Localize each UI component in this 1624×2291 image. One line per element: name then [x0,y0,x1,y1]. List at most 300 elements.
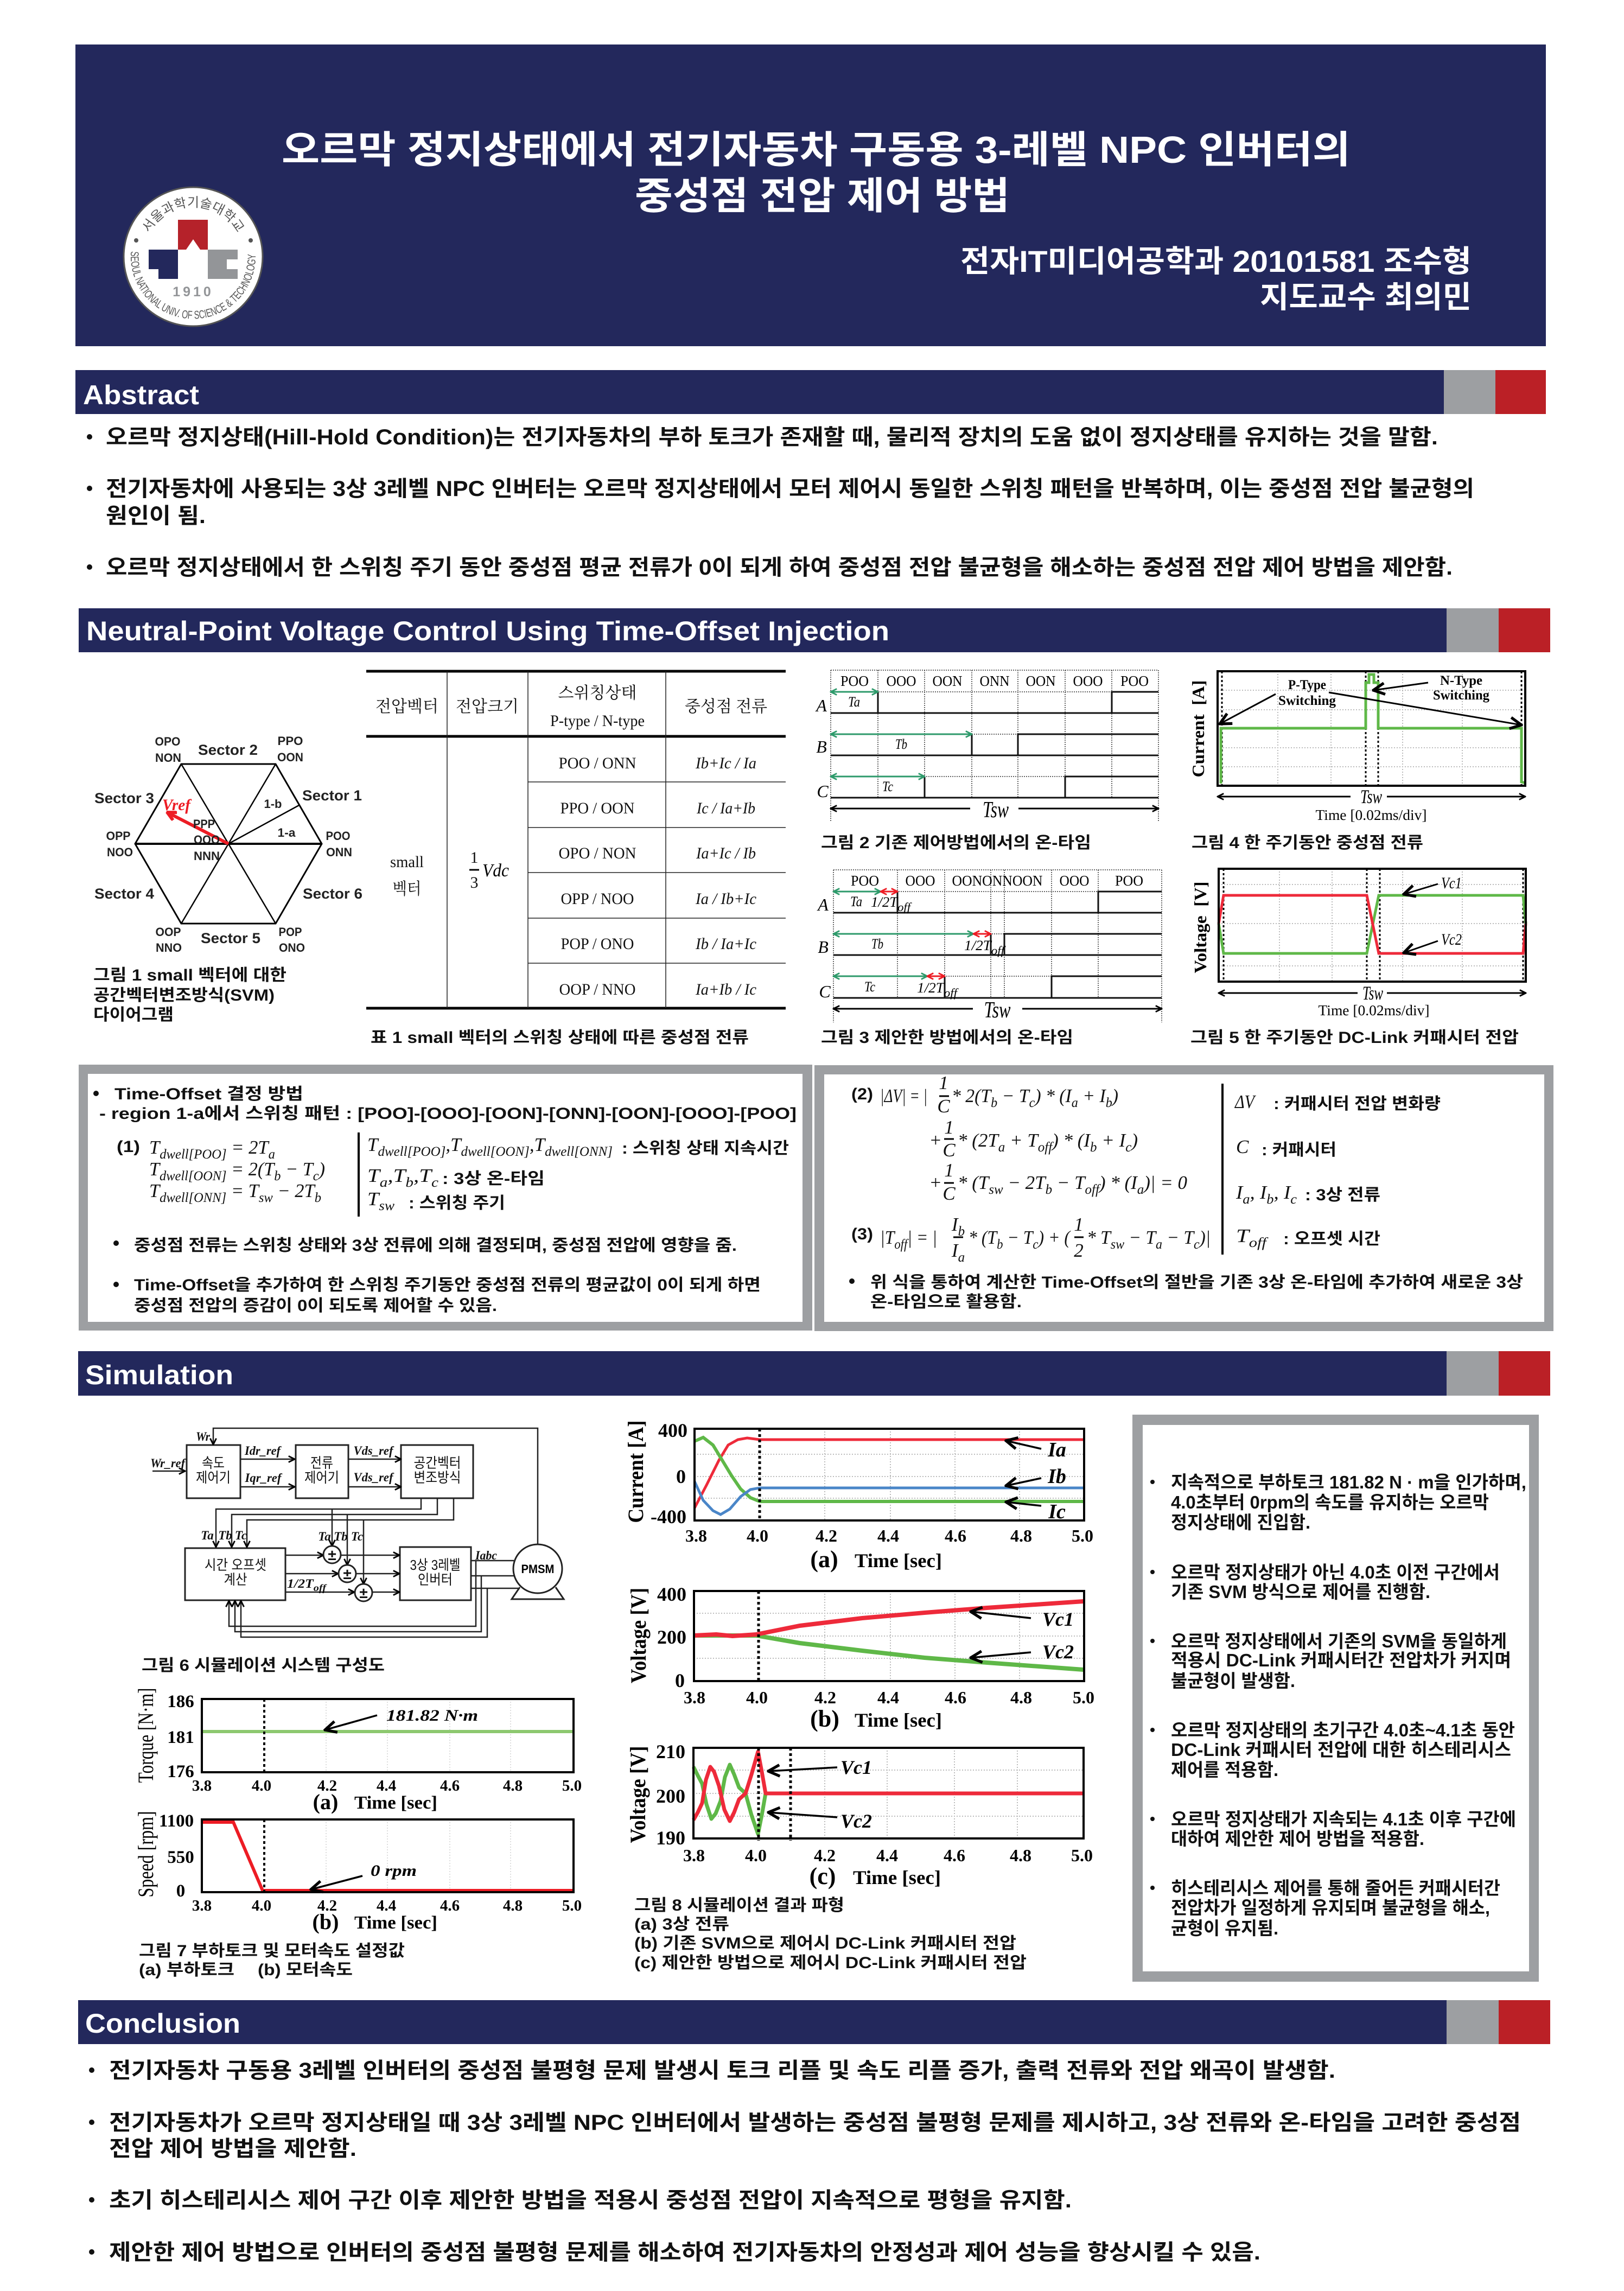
equation 1: = T [226,1180,260,1201]
figure 8a: three-phase current plot: Ib [1047,1465,1066,1488]
equation 1: − 2T [273,1180,316,1201]
equation 2: a [998,1140,1005,1155]
equation 3: * (T [969,1227,999,1248]
caption: figure 8 [634,1897,1027,1972]
figure 8a: three-phase current plot [623,1420,1093,1573]
vector arrow: Vref [168,813,228,844]
conclusion text block: 전압 제어 방법을 제안함. [109,2137,356,2161]
equation 1: a [269,1147,275,1162]
equation 2 and 3 legend: : 3상 전류 [1305,1186,1380,1204]
figure 6: simulation system block diagram: 3상 3레벨 [410,1557,460,1573]
figure 4: neutral-point current plot: N-Type [1440,673,1482,688]
equation 2: b [1090,1140,1097,1155]
section header: Neutral-Point Voltage Control [79,608,1550,652]
figure 7a: load torque plot: 3.8 [192,1777,212,1794]
figure 4: neutral-point current plot: Tsw [1360,786,1382,807]
figure 7a: load torque plot: Time [sec] [354,1793,437,1813]
figure 6: simulation system block diagram: 전류 [310,1455,333,1471]
equation 3: off [894,1237,909,1252]
figure 1: SVM hexagon diagram: Sector 1 [302,787,362,804]
figure 2: conventional on-time diagram: Ta [848,694,860,710]
panel: time-offset equations [814,1065,1553,1331]
equation 3: I [952,1240,958,1261]
equation 1 legend: : 3상 온-타임 [442,1170,545,1188]
figure 1: SVM hexagon diagram: Vref [162,796,192,814]
figure 3: proposed on-time diagram: Tc [864,979,875,995]
figure 1: SVM hexagon diagram: ONO [279,941,305,954]
equation 1 legend: b [405,1175,413,1190]
figure 8b: capacitor voltage with conventional SVM: 400 [657,1583,686,1605]
figure 7a: load torque plot: 4.6 [440,1777,460,1794]
equation 3: a [1156,1237,1162,1252]
abstract text block: 오르막 정지상태에서 한 스위칭 주기 동안 중성점 평균 전류가 0이 되게 하여 중성점 전압 불균형을 해소하는 중성점 전압 제어 방법을 제안함. [106,556,1453,580]
figure 1: SVM hexagon diagram: PPO [278,734,303,748]
figure 3: proposed on-time diagram: POO [851,873,879,889]
figure 1: SVM hexagon diagram: Sector 4 [94,886,154,902]
abstract text block: 전기자동차에 사용되는 3상 3레벨 NPC 인버터는 오르막 정지상태에서 모터 제어시 동일한 스위칭 패턴을 반복하며, 이는 중성점 전압 불균형의 [106,477,1474,501]
equation 1: c [313,1169,319,1183]
table 1: small vector switching states: Ib / Ia+Ic [695,935,756,953]
equation 2 and 3 legend: a [1243,1192,1250,1207]
equation 3: |T [880,1227,896,1248]
figure 7b: motor speed plot: 4.8 [503,1897,523,1914]
table 1: small vector switching states: 전압크기 [456,698,519,716]
figure 7b: motor speed plot: Time [sec] [354,1913,437,1933]
equation 2 [851,1072,1187,1204]
figure 4: neutral-point current plot: Switching [1278,693,1336,708]
equation 2 and 3 legend: b [1266,1192,1273,1207]
figure 2: conventional on-time diagram [815,670,1158,823]
equation 1 legend: ,T [530,1134,546,1155]
table 1: small vector switching states: 중성점 전류 [685,698,767,716]
figure 3: proposed on-time diagram [817,870,1162,1023]
figure 8c: capacitor voltage with proposed method [626,1741,1093,1889]
figure 7a: load torque plot: 4.0 [252,1777,271,1794]
figure 6: simulation system block diagram: Iqr_ref [245,1471,283,1485]
equation 1: T [149,1137,160,1158]
figure 6: simulation system block diagram: ± [343,1565,352,1582]
figure 6: simulation system block diagram: Vds_ref [354,1444,394,1458]
caption: figure 8: (c) 제안한 방법으로 제어시 DC-Link 커패시터 전압 [634,1954,1027,1972]
figure 6: simulation system block diagram: 제어기 [304,1469,339,1486]
equation 2: b [991,1096,997,1110]
figure 4: neutral-point current plot: Time [0.02ms/div] [1315,807,1427,823]
figure 8b: capacitor voltage with conventional SVM: 4.6 [945,1688,966,1707]
figure 1: SVM hexagon diagram: OOP [155,925,181,939]
figure 7a: load torque plot: 181 [167,1728,194,1747]
figure 5: DC-link capacitor voltage plot: Time [0.02ms/div] [1319,1002,1429,1019]
equation 1: T [149,1159,160,1180]
figure 6: simulation system block diagram: Tc [351,1530,363,1543]
equation 1: ) [318,1159,325,1180]
figure 1: SVM hexagon diagram: OON [277,750,303,764]
equation 1 legend: ,T [413,1165,433,1186]
figure 8a: three-phase current plot: Ia [1047,1439,1066,1461]
figure 8a: three-phase current plot: 0 [676,1466,686,1487]
figure 4: neutral-point current plot: Current [A] [1188,680,1208,777]
table 1: small vector switching states: Ic / Ia+Ib [696,799,755,817]
figure 2: conventional on-time diagram: B [816,737,827,756]
equation 3: * T [1087,1227,1112,1248]
figure 8b: capacitor voltage with conventional SVM: 200 [657,1626,686,1648]
figure 3: proposed on-time diagram: OOO [905,873,935,889]
table 1: small vector switching states: Ia+Ib / Ic [695,981,756,998]
equation 1: sw [259,1191,273,1205]
figure 8a: three-phase current plot: 5.0 [1072,1526,1093,1545]
table 1: small vector switching states [366,671,786,1008]
figure 3: proposed on-time diagram: off [944,986,959,1000]
equation 3: )| [1199,1227,1211,1248]
caption: figure 5: 그림 5 한 주기동안 DC-Link 커패시터 전압 [1190,1029,1519,1047]
equation 2: + [929,1172,942,1193]
figure 1: SVM hexagon diagram: POP [279,925,302,939]
figure 1: SVM hexagon diagram: NOO [107,845,133,859]
equation 2: )| = 0 [1143,1172,1187,1193]
figure 2: conventional on-time diagram: Tc [882,779,893,794]
figure 6: simulation system block diagram: ± [328,1547,336,1563]
caption: figure 1 [93,966,286,1024]
figure 7a: load torque plot: (a) [313,1790,338,1814]
figure 8b: capacitor voltage with conventional SVM: 4.4 [877,1688,899,1707]
table 1: small vector switching states: PPO / OON [560,799,635,817]
equation 3: 2 [1074,1240,1084,1261]
equation 2: (2) [851,1085,873,1103]
figure 8b: capacitor voltage with conventional SVM: 4.8 [1010,1688,1032,1707]
equation 2: off [1038,1140,1054,1155]
equation 2: ) * (I [1034,1085,1073,1106]
icon: university seal logo: SEOUL NATIONAL UNIV. OF SCIENCE & TECHNOLOGY [130,252,256,319]
equation 2: − 2T [1003,1172,1047,1193]
equation 3: | = | [907,1227,937,1248]
equation 1 legend: ,T [387,1165,407,1186]
figure 8c: capacitor voltage with proposed method: 210 [656,1741,685,1762]
figure 8b: capacitor voltage with conventional SVM: (b) [810,1705,839,1732]
figure 3: proposed on-time diagram: OOO [1059,873,1090,889]
table 1: small vector switching states: OPP / NOO [561,890,634,908]
figure 3: proposed on-time diagram: off [897,900,912,914]
figure 8a: three-phase current plot: 4.2 [816,1526,837,1545]
caption: figure 7: (b) 모터속도 [258,1961,353,1979]
figure 7b: motor speed plot: 3.8 [192,1897,212,1914]
panel: simulation explanation: 오르막 정지상태가 지속되는 4.1초 이후 구간에 [1171,1809,1516,1829]
equation 1 legend: dwell[ONN] [545,1144,613,1159]
figure 6: simulation system block diagram: Ta [201,1529,214,1542]
conclusion text block: 전기자동차가 오르막 정지상태일 때 3상 3레벨 NPC 인버터에서 발생하는 중성점 불평형 문제를 제시하고, 3상 전류와 온-타임을 고려한 중성점 [109,2111,1521,2135]
panel: time-offset determination [79,1065,812,1331]
figure 7a: load torque plot: 4.2 [317,1777,337,1794]
figure 7b: motor speed plot: 4.2 [317,1897,337,1914]
figure 8a: three-phase current plot: 4.6 [945,1526,966,1545]
equation 3 [851,1214,1211,1265]
equation 3: c [1033,1237,1039,1252]
icon: university seal logo: 1910 [173,284,214,300]
caption: figure 8: (a) 3상 전류 [634,1915,729,1933]
figure 7a: load torque plot: 5.0 [562,1777,582,1794]
figure 3: proposed on-time diagram: A [817,895,829,914]
figure 6: simulation system block diagram: 시간 오프셋 [205,1557,266,1573]
section header: Simulation [78,1351,1550,1396]
equation 2 and 3 legend [1234,1091,1441,1250]
figure 1: SVM hexagon diagram: Sector 6 [303,886,362,902]
equation 1 legend [367,1134,789,1213]
equation 2 and 3 legend: , I [1250,1182,1268,1203]
equation 2 and 3 legend: T [1236,1225,1246,1246]
equation 3: a [958,1250,965,1265]
equation 1 legend: dwell[POO] [378,1144,445,1159]
figure 1: SVM hexagon diagram: OPO [155,735,180,748]
equation 1 legend: c [431,1175,438,1190]
bullet: new on-time [849,1274,1523,1311]
equation 2 and 3 legend: c [1290,1192,1297,1207]
abstract text block: 원인이 됨. [106,504,206,528]
equation 1: = 2T [227,1137,270,1158]
icon: university seal logo [123,187,264,327]
title [282,129,1351,217]
figure 7a: load torque plot: 181.82 N·m [386,1707,478,1724]
figure 6: simulation system block diagram: 계산 [224,1571,247,1588]
figure 6: simulation system block diagram: 인버터 [418,1571,453,1588]
equation 2 and 3 legend: I [1236,1182,1243,1203]
figure 6: simulation system block diagram: 변조방식 [413,1469,461,1486]
equation 2 and 3 legend: : 오프셋 시간 [1283,1230,1380,1248]
equation 1 legend: sw [379,1199,394,1213]
equation 2: − T [997,1085,1030,1106]
panel: simulation explanation: 기존 SVM 방식으로 제어를 진행함. [1171,1582,1430,1602]
figure 8b: capacitor voltage with conventional SVM: 3.8 [684,1688,705,1707]
figure 8b: capacitor voltage with conventional SVM: 4.2 [814,1688,836,1707]
table 1: small vector switching states: Vdc [482,861,509,881]
figure 6: simulation system block diagram: 제어기 [196,1469,231,1486]
conclusion text block: 전기자동차 구동용 3레벨 인버터의 중성점 불평형 문제 발생시 토크 리플 및 속도 리플 증가, 출력 전류와 전압 왜곡이 발생함. [109,2059,1335,2083]
figure 8c: capacitor voltage with proposed method: 5.0 [1071,1845,1093,1865]
figure 7b: motor speed plot: (b) [313,1910,339,1934]
panel: simulation explanation: 대하여 제안한 제어 방법을 적용함. [1171,1829,1424,1849]
figure 6: simulation system block diagram: Wr [196,1430,211,1443]
equation 1 legend: a [380,1175,387,1190]
conclusion text block: 초기 히스테리시스 제어 구간 이후 제안한 방법을 적용시 중성점 전압이 지속적으로 평형을 유지함. [109,2188,1072,2212]
bullets: neutral-point current [113,1237,761,1315]
figure 8a: three-phase current plot: 4.0 [747,1526,768,1545]
figure 8c: capacitor voltage with proposed method: 4.6 [944,1845,965,1865]
equation 2 and 3 legend: , I [1273,1182,1292,1203]
equation 2: 1 [944,1117,954,1138]
panel: simulation explanation: 오르막 정지상태에서 기존의 SVM을 동일하게 [1171,1631,1507,1651]
figure 3: proposed on-time diagram: Tb [871,936,883,952]
section header: Simulation: Simulation [85,1360,233,1390]
equation 2: c [1029,1096,1035,1110]
figure 6: simulation system block diagram [150,1428,564,1637]
figure 6: simulation system block diagram: Tb [218,1529,232,1542]
figure 2: conventional on-time diagram: OON [932,673,963,689]
equation 2: c [1125,1140,1131,1155]
bullets: neutral-point current: 중성점 전류는 스위칭 상태와 3상 전류에 의해 결정되며, 중성점 전압에 영향을 줌. [134,1237,737,1255]
author and advisor: 전자IT미디어공학과 20101581 조수형 [960,244,1472,278]
figure 3: proposed on-time diagram: OONONNOON [952,873,1043,889]
equation 2: b [1106,1096,1112,1110]
figure 8a: three-phase current plot: Time [sec] [855,1550,942,1571]
figure 6: simulation system block diagram: Tb [334,1530,348,1543]
equation 2: * (2T [958,1130,998,1151]
figure 3: proposed on-time diagram: 1/2T [917,980,943,996]
caption: table 1: 표 1 small 벡터의 스위칭 상태에 따른 중성점 전류 [371,1029,749,1047]
figure 1: SVM hexagon diagram [94,734,362,954]
panel: simulation explanation: 오르막 정지상태가 아닌 4.0초 이전 구간에서 [1171,1562,1500,1582]
figure 6: simulation system block diagram: Vds_ref [354,1471,394,1484]
caption: figure 1: 그림 1 small 벡터에 대한 [93,966,286,984]
equation 3: I [952,1214,958,1235]
equation 3: 1 [1074,1214,1084,1235]
figure 7a: load torque plot: 176 [167,1762,194,1781]
caption: figure 1: 공간벡터변조방식(SVM) [93,987,275,1004]
figure 7a: load torque plot: Torque [N·m] [133,1688,158,1783]
equation 2 and 3 legend: : 커패시터 전압 변화량 [1273,1095,1441,1113]
figure 7b: motor speed plot: 1100 [159,1811,194,1831]
figure 8c: capacitor voltage with proposed method: 4.2 [814,1845,836,1865]
equation 1 legend: T [367,1134,378,1155]
bullets: neutral-point current: Time-Offset을 추가하여 한 스위칭 주기동안 중성점 전류의 평균값이 0이 되게 하면 [134,1276,761,1294]
figure 8a: three-phase current plot: -400 [651,1506,686,1528]
figure 1: SVM hexagon diagram: Sector 3 [94,790,154,806]
equation 2: 1 [939,1072,948,1093]
figure 3: proposed on-time diagram: off [991,944,1006,957]
heading: time-offset method: - region 1-a에서 스위칭 패턴 : [POO]-[OOO]-[OON]-[ONN]-[OON]-[OOO]-[POO] [99,1105,797,1123]
abstract text block: 오르막 정지상태(Hill-Hold Condition)는 전기자동차의 부하 토크가 존재할 때, 물리적 장치의 도움 없이 정지상태를 유지하는 것을 말함. [106,425,1438,449]
figure 6: simulation system block diagram: Ta [318,1530,331,1543]
figure 7a: load torque plot [133,1688,582,1814]
figure 2: conventional on-time diagram: Tb [895,736,907,752]
equation 3: b [958,1224,965,1239]
figure 1: SVM hexagon diagram: NNN [194,849,220,863]
figure 5: DC-link capacitor voltage plot: Voltage [V] [1190,881,1210,973]
figure 6: simulation system block diagram: Iabc [475,1549,497,1562]
conclusion text block [89,2059,1521,2264]
equation 1 [117,1137,325,1205]
figure 4: neutral-point current plot [1188,671,1525,823]
figure 6: simulation system block diagram: Idr_ref [244,1444,282,1458]
author and advisor: 지도교수 최의민 [1260,280,1472,314]
equation 2: |ΔV| = | [880,1085,927,1106]
equation 1: b [315,1191,321,1205]
panel: simulation explanation: 전압차가 일정하게 유지되며 불균형을 해소, [1171,1898,1490,1918]
equation 1: (1) [117,1138,140,1156]
equation 2: * 2(T [952,1085,992,1106]
figure 1: SVM hexagon diagram: 1-b [264,797,282,811]
equation 2: C [942,1140,956,1161]
figure 7a: load torque plot: 4.8 [503,1777,523,1794]
figure 1: SVM hexagon diagram: OPP [106,829,130,843]
table 1: small vector switching states: Ia+Ic / Ib [696,844,756,862]
figure 8a: three-phase current plot: 4.8 [1010,1526,1032,1545]
figure 1: SVM hexagon diagram: 1-a [278,826,296,839]
figure 8b: capacitor voltage with conventional SVM: Time [sec] [855,1709,942,1731]
figure 8b: capacitor voltage with conventional SVM: Voltage [V] [626,1588,651,1683]
figure 8c: capacitor voltage with proposed method: 4.4 [876,1845,898,1865]
table 1: small vector switching states: POO / ONN [559,754,636,772]
figure 4: neutral-point current plot: P-Type [1288,678,1326,692]
figure 8b: capacitor voltage with conventional SVM: 5.0 [1073,1688,1094,1707]
figure 6: simulation system block diagram: 1/2T [287,1577,310,1590]
figure 8a: three-phase current plot: 400 [658,1420,687,1441]
figure 7b: motor speed plot: 0 [176,1881,185,1901]
figure 5: DC-link capacitor voltage plot: Vc1 [1441,874,1462,892]
figure 1: SVM hexagon diagram: Sector 5 [201,930,260,946]
panel: simulation explanation: 지속적으로 부하토크 181.82 N · m을 인가하며, [1171,1472,1526,1492]
equation 3: (3) [851,1225,873,1243]
heading: time-offset method: Time-Offset 결정 방법 [114,1085,303,1103]
figure 8c: capacitor voltage with proposed method: Time [sec] [853,1867,941,1888]
equation 3: − T [1162,1227,1195,1248]
figure 2: conventional on-time diagram: A [815,696,827,715]
equation 2 and 3 legend: C [1236,1136,1249,1157]
figure 8c: capacitor voltage with proposed method: Voltage [V] [626,1746,650,1843]
figure 7b: motor speed plot: 550 [167,1848,194,1867]
equation 3: c [1194,1237,1200,1252]
table 1: small vector switching states: 3 [470,874,479,892]
table 1: small vector switching states: 1 [470,849,479,867]
figure 7a: load torque plot: 186 [167,1692,194,1711]
figure 6: simulation system block diagram: 공간벡터 [413,1455,461,1471]
equation 2 and 3 legend: off [1249,1236,1269,1250]
figure 8a: three-phase current plot: Current [A] [623,1421,648,1523]
table 1: small vector switching states: 벡터 [393,880,421,898]
figure 5: DC-link capacitor voltage plot: Vc2 [1441,931,1462,949]
caption: figure 7: 그림 7 부하토크 및 모터속도 설정값 [139,1942,405,1960]
figure 8b: capacitor voltage with conventional SVM: 0 [675,1670,685,1691]
table 1: small vector switching states: OOP / NNO [559,981,636,998]
caption: figure 3: 그림 3 제안한 방법에서의 온-타임 [821,1029,1073,1047]
author and advisor [960,244,1472,314]
equation 1 legend: T [367,1188,378,1210]
equation 2: + [929,1130,942,1151]
panel: simulation explanation: 적용시 DC-Link 커패시터간 전압차가 커지며 [1171,1650,1511,1670]
equation 2: − T [1052,1172,1086,1193]
equation 2: C [937,1096,950,1117]
figure 7b: motor speed plot [133,1811,582,1934]
bullets: neutral-point current: 중성점 전압의 증감이 0이 되도록 제어할 수 있음. [134,1297,497,1315]
figure 8a: three-phase current plot: 3.8 [685,1526,707,1545]
caption: figure 7: (a) 부하토크 [139,1961,234,1979]
equation 3: b [997,1237,1003,1252]
figure 3: proposed on-time diagram: Ta [850,894,862,909]
figure 8c: capacitor voltage with proposed method: 4.0 [745,1845,767,1865]
equation 1: T [149,1180,160,1201]
caption: figure 8: (b) 기존 SVM으로 제어시 DC-Link 커패시터 전압 [634,1934,1016,1952]
figure 2: conventional on-time diagram: OOO [887,673,916,689]
section header: Abstract: Abstract [83,380,199,410]
figure 3: proposed on-time diagram: POO [1115,873,1143,889]
panel: simulation explanation: 균형이 유지됨. [1171,1918,1278,1938]
bullet: new on-time: 온-타임으로 활용함. [870,1293,1022,1311]
header banner [75,44,1546,346]
equation 2: + I [1078,1085,1107,1106]
figure 6: simulation system block diagram: off [314,1582,327,1593]
figure 1: SVM hexagon diagram: OOO [194,833,220,847]
figure 8c: capacitor voltage with proposed method: 200 [656,1785,685,1807]
equation 1: b [274,1169,281,1183]
caption: figure 6: 그림 6 시뮬레이션 시스템 구성도 [142,1657,385,1675]
equation 2: + T [1005,1130,1039,1151]
caption: figure 4: 그림 4 한 주기동안 중성점 전류 [1192,834,1423,852]
equation 3: ) + ( [1037,1227,1071,1248]
figure 7b: motor speed plot: 0 rpm [371,1862,417,1880]
figure 1: SVM hexagon diagram: NON [155,751,181,765]
equation 1: = 2(T [227,1159,276,1180]
table 1: small vector switching states: POP / ONO [561,935,634,953]
caption: figure 8: 그림 8 시뮬레이션 결과 파형 [634,1897,844,1914]
figure 7b: motor speed plot: 4.6 [440,1897,460,1914]
figure 2: conventional on-time diagram: C [817,781,829,801]
figure 8c: capacitor voltage with proposed method: 4.8 [1010,1845,1031,1865]
